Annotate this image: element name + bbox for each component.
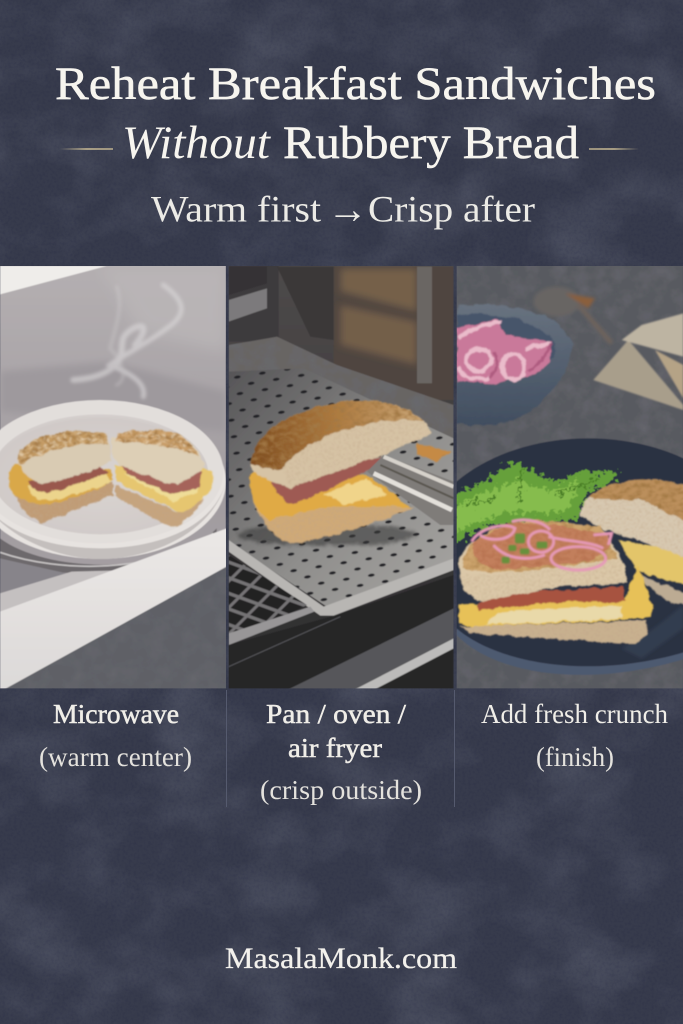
- spatula: [367, 455, 454, 525]
- microwave ceiling: [0, 266, 107, 294]
- sandwich left half: [8, 431, 113, 523]
- caption: fresh crunch: Add fresh crunch: [481, 699, 668, 729]
- caption: fresh crunch: (finish): [536, 742, 614, 772]
- caption: pan / oven / air fryer: Pan / oven /: [266, 699, 407, 729]
- oven door bars: [229, 576, 454, 672]
- arrow: →: [327, 186, 368, 232]
- onion bowl: [457, 305, 572, 425]
- perforated tray: [229, 368, 454, 613]
- turntable: [0, 528, 217, 574]
- caption: pan / oven / air fryer: [260, 699, 422, 805]
- heading line 2: [60, 117, 639, 169]
- panel dividers: [226, 690, 454, 807]
- heading line 2: Without: [122, 117, 271, 169]
- white door frame: [0, 528, 227, 690]
- caption: microwave: Microwave: [53, 699, 179, 729]
- caption: microwave: (warm center): [39, 742, 192, 772]
- napkin: [593, 313, 683, 410]
- countertop: [3, 567, 227, 690]
- footer site name: MasalaMonk.com: [225, 942, 457, 975]
- steam: [73, 285, 181, 397]
- caption: fresh crunch: [481, 699, 668, 772]
- oven window with reflected food: [334, 267, 454, 400]
- caption: microwave: [39, 699, 192, 772]
- subtitle: Warm first: [151, 190, 322, 230]
- tray rim: [229, 337, 454, 438]
- sandwich right half: [111, 430, 213, 528]
- background spoon: [533, 287, 612, 343]
- pickled onion and herb garnish: [472, 520, 612, 570]
- panel: fresh crunch photo: [456, 266, 683, 688]
- wire rack: [229, 555, 307, 642]
- lettuce: [452, 462, 618, 545]
- subtitle: Crisp after: [368, 190, 535, 230]
- plate: [0, 464, 226, 559]
- heading line 1: Reheat Breakfast Sandwiches: [55, 58, 656, 110]
- sandwich: [237, 401, 450, 546]
- heading line 2: Rubbery Bread: [283, 117, 579, 169]
- panel: oven / air fryer photo: [227, 265, 454, 690]
- front sandwich half: [458, 520, 653, 644]
- title: [55, 58, 656, 169]
- microwave floor: [0, 558, 67, 593]
- rear sandwich half: [580, 480, 683, 605]
- dark plate: [456, 438, 683, 667]
- subtitle: [151, 186, 535, 232]
- panel: microwave photo: [0, 265, 227, 690]
- caption: pan / oven / air fryer: air fryer: [288, 733, 382, 763]
- caption: pan / oven / air fryer: (crisp outside): [260, 775, 422, 805]
